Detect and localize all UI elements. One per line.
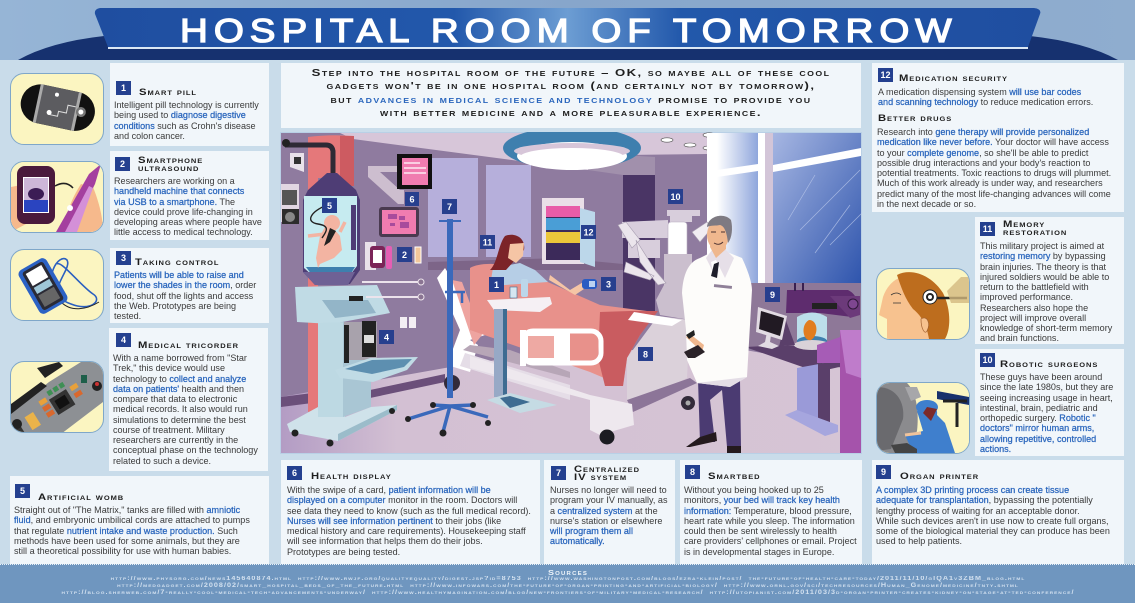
text: a centralized system at the (550, 506, 658, 516)
number labels: 2 (402, 250, 407, 260)
number labels: 1 (494, 280, 499, 290)
text: injured soldiers would be able to (980, 272, 1109, 282)
text: adequate for transplantation, bypassing the potentially (876, 495, 1093, 505)
number labels: 6 (409, 194, 415, 204)
number labels: 11 (483, 238, 492, 248)
intro text: gadgets won't be in one hospital room (and certainly not by tomorrow), (327, 80, 815, 92)
panel: health display (281, 460, 540, 564)
illustration: bedside control (10, 249, 104, 321)
badge 8: 8 (690, 467, 695, 477)
text (878, 87, 1093, 108)
heading: Medication security (899, 73, 1008, 83)
title: HOSPITAL ROOM OF TOMORROW (180, 11, 952, 49)
shelf cabinet (542, 198, 595, 267)
text: While such devices aren't in use now to create full organs, (876, 516, 1109, 526)
text: compare that data to electronic (113, 394, 237, 404)
heading: ultrasound (138, 163, 199, 173)
text: better drugs: potential treatments. Toxic reactions to drugs will plummet. (877, 168, 1111, 178)
text: Patients will be able to raise and (114, 270, 244, 280)
badge 4 (116, 333, 131, 347)
text: and brain functions. (980, 333, 1059, 343)
badge 1 (116, 81, 131, 95)
text: Intelligent pill technology is currently (114, 100, 259, 110)
text: since the late 1980s, but they are (980, 382, 1113, 392)
text: project will improve overall (980, 313, 1086, 323)
text: With the swipe of a card, patient information will be (287, 485, 491, 495)
intro text (312, 67, 830, 119)
text: seeing increasing usage in heart, (980, 392, 1113, 402)
heading: Robotic surgeons (1000, 359, 1098, 369)
monitor: health display (368, 154, 432, 204)
text: tested. (114, 311, 141, 321)
text: related to such a device. (113, 456, 211, 466)
header band (0, 0, 1135, 60)
wall under window (740, 283, 861, 372)
sources footer (0, 564, 1135, 603)
text (980, 372, 1113, 454)
badge 2: 2 (120, 159, 125, 169)
heading: Organ printer (900, 471, 979, 481)
badge 4: 4 (121, 335, 126, 345)
text: better drugs: to your complete genome, so she'll be able to predict (877, 148, 1088, 158)
heading: Smartphone (138, 155, 203, 165)
text: better drugs: Research into gene therapy will provide personalized (877, 127, 1089, 137)
illustration: smartphone ultrasound (10, 161, 104, 233)
text: displayed on a computer monitor in the room. Doctors will (287, 495, 517, 505)
intro text: but advances in medical science and technology promise to provide you (330, 94, 811, 106)
badge 5 (15, 484, 30, 498)
panel: centralized IV system (544, 460, 675, 564)
text (14, 505, 250, 556)
scene: hospital room illustration (280, 132, 862, 454)
text: monitors, your bed will track key health (684, 495, 840, 505)
text: methods have been used for some animals, but they are (14, 536, 240, 546)
text: better drugs: in the next decade or so. (877, 199, 976, 209)
source links: http://medgadget.com/2008/02/smart_hospital_beds_of_the_future.html http://www.infowars.com/the-future-of-organ-printing-and-artificial-biology/ http://www.ornl.gov/sci/techresources/Human_Genome/medicine/tnty.shtml (117, 583, 1018, 589)
panel: smart pill (110, 63, 269, 146)
number labels: 10 (670, 192, 681, 202)
text: better drugs (877, 127, 1111, 209)
text: allowing repetitive, controlled (980, 434, 1096, 444)
text: could then be sent wirelessly to health (684, 526, 837, 536)
heading: Taking control (135, 257, 219, 267)
text: nurse's station or elsewhere (550, 516, 662, 526)
text (287, 485, 531, 557)
outlets (400, 317, 416, 328)
text: doctors" mirror human arms, (980, 423, 1094, 433)
heading: Smart pill (139, 87, 197, 97)
text: Prototypes are being tested. (287, 546, 400, 556)
text: technology to collect and analyze (113, 374, 246, 384)
text: knowledge of short-term memory (980, 323, 1112, 333)
text: and scanning technology to reduce medication errors. (878, 97, 1093, 107)
text: These guys have been around (980, 372, 1102, 382)
panel: smartphone ultrasound (110, 151, 269, 240)
number labels: 7 (447, 202, 452, 212)
text: developing areas where people have (114, 217, 262, 227)
text: Researchers also hope the (980, 302, 1088, 312)
number labels: 9 (770, 290, 775, 300)
text: via USB to a smartphone. The (114, 196, 235, 206)
tablet (379, 207, 419, 237)
panel: taking control (110, 248, 269, 323)
badge 12: 12 (880, 70, 890, 80)
illustration: smart pill (10, 73, 104, 145)
text: conceptual phase on the technology (113, 445, 258, 455)
phone (365, 242, 421, 270)
text: better drugs: possible drug interactions and your body's reaction to (877, 158, 1090, 168)
panel: artificial womb (10, 476, 269, 564)
badge 2 (115, 157, 130, 171)
text: better drugs: predict many of the most life-changing advances will come (877, 188, 1111, 198)
text: lengthy process of waiting for an acceptable donor. (876, 506, 1080, 516)
text (114, 100, 259, 141)
intro text: with better medicine and a more pleasurable experience. (380, 107, 762, 119)
text: will see information that helps them do their jobs. (287, 536, 483, 546)
badge 10: 10 (982, 355, 992, 365)
badge 9 (876, 465, 891, 479)
text: care providers' cellphones or email. Project (684, 536, 857, 546)
text: and colon cancer. (114, 131, 185, 141)
text: will program them all (550, 526, 633, 536)
floor (281, 350, 861, 453)
text: Nurses will see information pertinent to their jobs (like (287, 516, 501, 526)
heading: Health display (311, 471, 392, 481)
text: medical history and care requirements). Housekeeping staff (287, 526, 526, 536)
badge 7 (551, 466, 566, 480)
badge 1: 1 (121, 83, 126, 93)
intro panel (281, 63, 861, 128)
text: see data they need to know (such as the full medical record). (287, 506, 531, 516)
text (876, 485, 1110, 546)
text: device could prove life-changing in (114, 207, 253, 217)
text: intestinal, brain, pediatric and (980, 403, 1098, 413)
overbed table (487, 279, 557, 413)
headboard & bed (437, 264, 697, 444)
panel: medication security and better drugs (872, 63, 1124, 212)
badge 11 (980, 222, 995, 236)
text: lower the shades in the room, order (114, 280, 256, 290)
baby pod (282, 139, 360, 285)
panel: memory restoration (975, 217, 1124, 344)
ceiling light (503, 127, 641, 169)
grab bars (362, 282, 421, 297)
text: A complex 3D printing process can create tissue (876, 485, 1069, 495)
text: Trek," this device would use (113, 363, 225, 373)
heading: restoration (1003, 227, 1067, 237)
text: data on patients' health and then (113, 384, 244, 394)
badge 3 (116, 251, 131, 265)
text: that regulate nutrient intake and waste production. Such (14, 526, 238, 536)
text: used to help patients. (876, 536, 962, 546)
number labels (322, 189, 780, 361)
text: A medication dispensing system will use bar codes (878, 87, 1081, 97)
panel: robotic surgeons (975, 349, 1124, 456)
intro text: Step into the hospital room of the future – OK, so maybe all of these cool (312, 67, 830, 79)
text: Straight out of "The Matrix," tanks are filled with amniotic (14, 505, 240, 515)
text: course of treatment. Military (113, 425, 225, 435)
text (114, 270, 256, 321)
badge 10 (980, 353, 995, 367)
text: some of the biological material they can produce has been (876, 526, 1110, 536)
text: With a name borrowed from "Star (113, 353, 247, 363)
text: conditions such as Crohn's disease (114, 120, 256, 130)
doctor (682, 216, 752, 453)
badge 9: 9 (881, 467, 886, 477)
robot arms (618, 210, 712, 320)
text: fluid, and embryonic umbilical cords are attached to pumps (14, 515, 250, 525)
heading: better drugs: Better drugs (878, 113, 952, 123)
illustration: robotic surgeons (876, 382, 970, 454)
text: is in developmental stages in Europe. (684, 546, 834, 556)
heading: Centralized (574, 464, 640, 474)
illustration: tricorder (10, 361, 104, 433)
badge 6 (287, 466, 302, 480)
ceiling (340, 133, 707, 170)
badge 7: 7 (556, 468, 561, 478)
text (113, 353, 258, 466)
number labels: 3 (606, 280, 611, 290)
text: better drugs: medication like never before. Your doctor will have access (877, 137, 1109, 147)
text (980, 241, 1112, 343)
text: food, shut off the lights and access (114, 290, 253, 300)
badge 6: 6 (292, 468, 297, 478)
text (114, 176, 262, 237)
patient (490, 235, 597, 295)
wall monitor unit (281, 184, 299, 222)
badge 3: 3 (121, 253, 126, 263)
text: simulations to determine the best (113, 414, 246, 424)
badge 8 (685, 465, 700, 479)
text: Researchers are working on a (114, 176, 235, 186)
desk and printer (745, 283, 861, 453)
text: This military project is aimed at (980, 241, 1104, 251)
text: handheld machine that connects (114, 186, 244, 196)
badge 12 (878, 68, 893, 82)
panel: organ printer (872, 460, 1124, 564)
text: Without you being hooked up to 25 (684, 485, 824, 495)
badge 11: 11 (983, 224, 992, 234)
text: medical records. It also would run (113, 404, 248, 414)
number labels: 5 (327, 201, 332, 211)
number labels: 4 (384, 332, 389, 342)
source links: http://www.physorg.com/news145640874.html http://www.rwjf.org/qualityequality/digest.jsp?id=8753 http://www.washingtonpost.com/blogs/ezra-klein/post/ the-future-of-health-care-today/2011/11/10/gIQA1v3ZBM_blog.html (110, 576, 1025, 582)
heading (1003, 219, 1067, 237)
console (287, 285, 418, 446)
text: automatically. (550, 536, 605, 546)
text: better drugs: Much of this work already is under way, and researchers (877, 178, 1103, 188)
number labels: 12 (583, 228, 594, 238)
text: information: Temperature, blood pressure, (684, 506, 852, 516)
illustration: memory restoration (876, 268, 970, 340)
text: brain injuries. The theory is that (980, 262, 1106, 272)
text: orthopedic surgery. Robotic " (980, 413, 1096, 423)
text (684, 485, 857, 557)
text: actions. (980, 444, 1011, 454)
text: improved performance. (980, 292, 1073, 302)
text: heart rate while you sleep. The information (684, 516, 855, 526)
text: the Web. Prototypes are being (114, 301, 236, 311)
text: program your IV manually, as (550, 495, 668, 505)
heading: Memory (1003, 219, 1045, 229)
text: being used to diagnose digestive (114, 110, 246, 120)
text (550, 485, 668, 546)
heading (574, 464, 640, 482)
heading (138, 155, 203, 173)
source links: http://blog.sherweb.com/7-really-cool-medical-tech-advancements-underway/ http://www.healthymagination.com/blog/new-frontiers-of-military-medical-research/ http://utopianist.com/2011/03/3d-organ-printer-creates-kidney-on-stage-at-ted-conference/ (61, 590, 1074, 596)
curtain (308, 135, 354, 412)
text: little access to medical technology. (114, 227, 253, 237)
wall panel icon (290, 153, 304, 172)
badge 5: 5 (20, 486, 25, 496)
window (707, 133, 861, 283)
sources heading: Sources (547, 568, 588, 577)
text: researchers are currently in the (113, 435, 238, 445)
heading: Smartbed (708, 471, 760, 481)
source links (61, 576, 1074, 596)
IV stand (405, 219, 491, 436)
heading: Artificial womb (38, 492, 124, 502)
number labels: 8 (643, 350, 648, 360)
heading: IV system (574, 472, 627, 482)
text: restoring memory by bypassing (980, 251, 1106, 261)
text: still a theoretical possibility for use with human babies. (14, 546, 231, 556)
panel: medical tricorder (109, 328, 268, 471)
text: Nurses no longer will need to (550, 485, 667, 495)
panel: smartbed (680, 460, 862, 564)
text: return to the battlefield with (980, 282, 1089, 292)
heading: Medical tricorder (138, 340, 239, 350)
